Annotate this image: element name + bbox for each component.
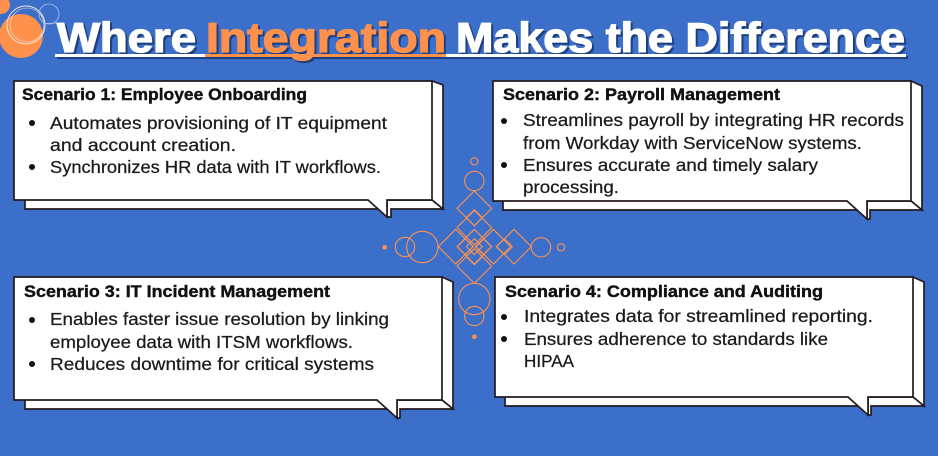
bullet list: scenario 4 — [501, 306, 873, 371]
bullet list: scenario 2: Ensures accurate and timely salary — [523, 155, 818, 175]
title: Integration — [206, 14, 446, 61]
bullet list: scenario 1: Synchronizes HR data with IT workflows. — [50, 157, 381, 177]
panel: scenario 2 payroll management — [493, 81, 922, 219]
bullet list: scenario 1: Automates provisioning of IT equipment — [50, 113, 387, 133]
bullet list: scenario 1: and account creation. — [50, 135, 236, 155]
heading: scenario 3: Scenario 3: IT Incident Management — [24, 283, 331, 301]
bullet list: scenario 3: Reduces downtime for critical systems — [50, 354, 374, 374]
heading: scenario 1: Scenario 1: Employee Onboarding — [22, 86, 307, 104]
bullet list: scenario 3: employee data with ITSM workflows. — [50, 332, 353, 352]
heading: scenario 4: Scenario 4: Compliance and Auditing — [505, 283, 823, 301]
bullet list: scenario 2: Streamlines payroll by integrating HR records — [523, 110, 904, 130]
bullet list: scenario 3: Enables faster issue resolution by linking — [50, 309, 389, 329]
bullet list: scenario 3 — [29, 309, 389, 374]
title: Where — [57, 14, 196, 61]
bullet list: scenario 4: Integrates data for streamlined reporting. — [524, 306, 873, 326]
panel: scenario 4 compliance and auditing — [495, 277, 924, 415]
bullet list: scenario 4: Ensures adherence to standards like — [524, 329, 828, 349]
bullet list: scenario 4: HIPAA — [524, 351, 574, 371]
bullet list: scenario 2: from Workday with ServiceNow systems. — [523, 133, 862, 153]
title — [55, 14, 906, 61]
panel: scenario 1 employee onboarding — [14, 81, 443, 217]
title: Makes the Difference — [456, 14, 905, 61]
heading: scenario 2: Scenario 2: Payroll Management — [503, 86, 781, 104]
bullet list: scenario 1 — [29, 113, 387, 177]
central geometric ornament — [382, 158, 565, 339]
panel: scenario 3 it incident management — [14, 277, 453, 418]
bullet list: scenario 2 — [501, 110, 904, 197]
decorative circles: top-left — [0, 0, 59, 58]
bullet list: scenario 2: processing. — [523, 177, 619, 197]
